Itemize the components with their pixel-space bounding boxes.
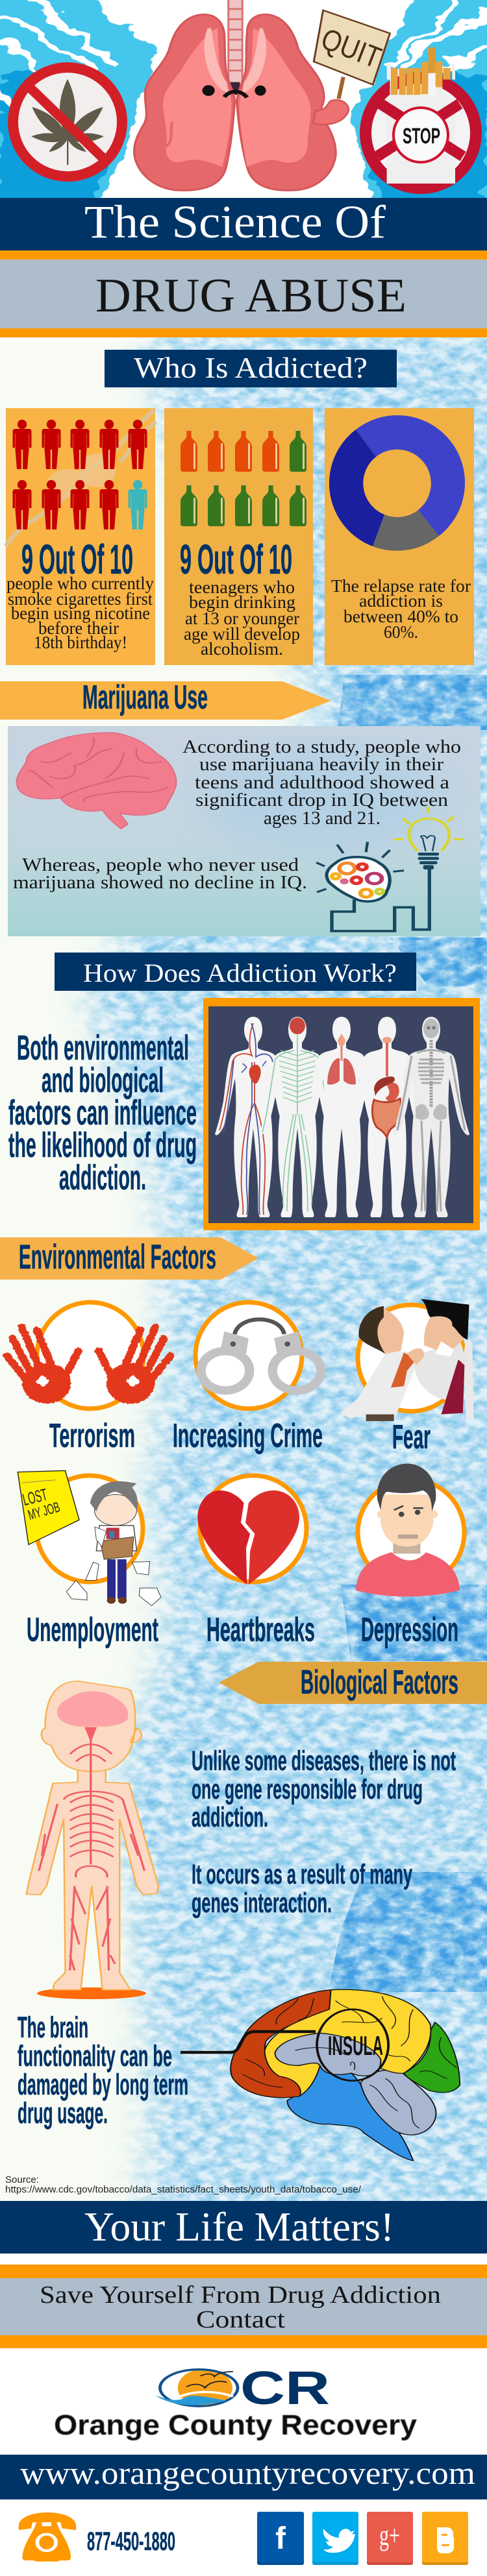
icon: fear two men — [340, 1299, 474, 1421]
description: 18th birthday! — [34, 633, 127, 652]
text: study result: teens and adulthood showed a — [195, 773, 450, 793]
icon: gear brain and light bulb — [316, 807, 463, 931]
heading: how does addiction work — [55, 953, 416, 991]
label: insula: INSULA — [328, 2030, 383, 2061]
panel: alcohol statistic — [164, 408, 313, 665]
text: one gene — [192, 1745, 456, 1833]
sign text: QUIT — [317, 21, 386, 75]
description: between 40% to — [343, 607, 458, 626]
text: both environmental and biological: and biological — [42, 1061, 164, 1100]
text: gene interaction — [192, 1859, 412, 1919]
icon: facebook — [257, 2512, 304, 2565]
description: before their — [38, 618, 119, 638]
figure: nervous system — [259, 1017, 336, 1217]
arrow heading: biological factors — [219, 1662, 487, 1704]
label: heartbreaks: Heartbreaks — [206, 1611, 315, 1649]
description: smoke cigarettes first — [8, 589, 153, 609]
page background — [0, 337, 487, 2201]
text: gene interaction: genes interaction. — [192, 1888, 332, 1919]
banner: save yourself: Contact — [196, 2306, 286, 2333]
hero illustration — [0, 0, 487, 214]
panel: relapse rate — [325, 408, 474, 665]
description: 60%. — [384, 622, 418, 642]
text: study result: ages 13 and 21. — [264, 808, 381, 829]
icon: no marijuana sign — [13, 67, 122, 176]
text: comparison: Whereas, people who never used — [22, 855, 299, 875]
text: both environmental and biological — [8, 1028, 197, 1197]
label: terrorism: Terrorism — [49, 1417, 135, 1455]
banner: your life matters — [0, 2201, 487, 2254]
figure: skeletal system — [393, 1017, 469, 1217]
label: increasing crime: Increasing Crime — [173, 1417, 323, 1455]
source citation — [5, 2174, 362, 2195]
description: people who currently — [6, 574, 154, 593]
figure: circulatory system — [215, 1017, 292, 1217]
source citation: https://www.cdc.gov/tobacco/data_statistics/fact_sheets/youth_data/tobacco_use/ — [5, 2184, 362, 2195]
icon: unemployment man with note — [18, 1470, 161, 1606]
description — [331, 576, 471, 642]
description: The relapse rate for — [331, 576, 471, 596]
text: study result: use marijuana heavily in their — [199, 755, 444, 775]
panel: marijuana study — [8, 726, 481, 936]
heading: who is addicted — [105, 350, 397, 387]
description: begin using nicotine — [11, 603, 150, 623]
title banner — [0, 196, 487, 337]
pictogram: 9 of 10 bottles — [181, 426, 306, 526]
heading: who is addicted: Who Is Addicted? — [134, 351, 368, 384]
illustration: brain with insula callout — [181, 1989, 460, 2161]
logo name: Orange County Recovery — [54, 2409, 418, 2441]
text: comparison: marijuana showed no decline in IQ. — [13, 873, 307, 893]
text: comparison — [13, 855, 307, 893]
text: one gene: addiction. — [192, 1802, 268, 1833]
icon: stop cigarettes sign — [366, 47, 476, 188]
description: alcoholism. — [201, 639, 283, 659]
statistic: 9 Out Of 10 — [21, 536, 133, 583]
logo mark — [155, 2369, 238, 2407]
icon: google plus: g+ — [379, 2520, 400, 2551]
description: age will develop — [184, 624, 300, 644]
text: brain functionality: The brain — [18, 2011, 88, 2044]
label: unemployment: Unemployment — [27, 1611, 158, 1649]
arrow heading: marijuana use: Marijuana Use — [82, 679, 208, 716]
water splash backdrop — [0, 0, 487, 214]
text: study result: According to a study, people who — [182, 737, 461, 757]
text: study result — [182, 737, 461, 829]
text: both environmental and biological: Both environmental — [17, 1028, 189, 1067]
icon: google plus — [367, 2512, 413, 2565]
icon: increasing crime handcuffs — [195, 1302, 321, 1409]
banner: website: www.orangecountyrecovery.com — [20, 2455, 475, 2491]
figure: digestive system — [349, 1017, 425, 1217]
icon: twitter — [312, 2512, 358, 2565]
phone number: 877-450-1880 — [87, 2527, 175, 2556]
icon: facebook: f — [275, 2521, 286, 2556]
icon: pink brain — [17, 733, 176, 829]
note text: LOST — [21, 1485, 49, 1509]
text: brain functionality: damaged by long term — [18, 2068, 188, 2101]
text: brain functionality — [18, 2011, 188, 2130]
arrow heading: environmental factors — [0, 1237, 258, 1280]
title line 1: The Science Of — [84, 196, 386, 248]
statistic: 9 Out Of 10 — [180, 536, 292, 583]
arrow heading: environmental factors: Environmental Factors — [19, 1238, 216, 1276]
icon: unemployment man with note: MY JOB — [26, 1499, 62, 1523]
icon: terrorism bloody hands — [7, 1302, 170, 1409]
logo: orange county recovery: CR — [240, 2363, 330, 2414]
donut chart — [329, 415, 465, 551]
icon: blogger — [422, 2512, 468, 2565]
icon: telephone — [19, 2512, 76, 2562]
chain illustration — [6, 410, 156, 546]
description: at 13 or younger — [185, 609, 299, 628]
label: fear: Fear — [392, 1418, 431, 1456]
description: addiction is — [359, 591, 443, 611]
logo: orange county recovery — [54, 2363, 418, 2441]
banner: save yourself — [0, 2265, 487, 2348]
text: both environmental and biological: addiction. — [59, 1158, 146, 1197]
description — [184, 577, 300, 659]
title line 2: DRUG ABUSE — [95, 269, 406, 322]
text: brain functionality: functionality can be — [18, 2039, 172, 2072]
description: begin drinking — [189, 592, 295, 612]
arrow heading: marijuana use — [0, 679, 331, 720]
panel: human body systems — [203, 998, 480, 1230]
description: teenagers who — [189, 577, 295, 597]
illustration: human nervous system — [27, 1681, 158, 1999]
icon: depressed man — [356, 1464, 464, 1597]
social icons — [257, 2512, 468, 2565]
panel: nicotine statistic — [6, 408, 156, 665]
banner: save yourself: Save Yourself From Drug Addiction — [40, 2281, 441, 2309]
text: study result: significant drop in IQ between — [195, 790, 448, 810]
heading: how does addiction work: How Does Addiction Work? — [83, 958, 397, 988]
text: both environmental and biological: the likelihood of drug — [8, 1126, 197, 1165]
illustration: sad lungs holding quit sign — [134, 0, 390, 190]
icon: stop cigarettes sign: STOP — [403, 124, 440, 149]
source citation: Source: — [5, 2174, 39, 2185]
contact: phone — [19, 2512, 175, 2562]
description — [6, 574, 154, 652]
icon: heartbreak — [197, 1476, 306, 1585]
text: brain functionality: drug usage. — [18, 2096, 108, 2130]
figure: respiratory system — [303, 1017, 380, 1217]
pictogram: 9 of 10 people — [13, 420, 147, 529]
banner: your life matters: Your Life Matters! — [84, 2204, 394, 2250]
text: both environmental and biological: factors can influence — [8, 1093, 197, 1132]
